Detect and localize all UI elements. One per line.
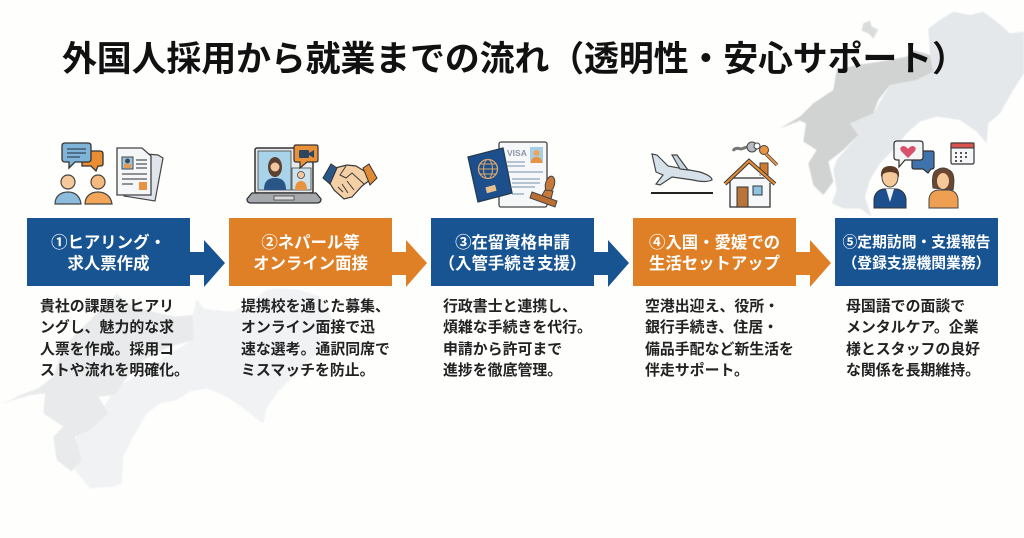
description text: 行政書士と連携し、 — [443, 299, 577, 315]
panel: step 1 hearing — [27, 142, 225, 379]
step heading box: 生活セットアップ — [649, 254, 780, 272]
step heading box: ⑤定期訪問・支援報告 — [842, 234, 990, 250]
icon: people talking and job document — [54, 142, 164, 205]
description text: 様とスタッフの良好 — [846, 342, 980, 358]
description text — [846, 298, 980, 379]
step heading box: ②ネパール等 — [261, 234, 360, 252]
icon: passport visa and stamp — [467, 141, 558, 208]
step heading box: ①ヒアリング・ — [51, 234, 166, 252]
icon: passport visa and stamp: VISA — [507, 148, 527, 158]
panel: step 4 arrival and setup — [633, 142, 831, 379]
icon: staff, speech bubbles and calendar — [874, 140, 975, 208]
arrow — [190, 240, 225, 287]
icon: laptop video call and handshake — [246, 144, 378, 204]
step heading box — [633, 218, 796, 286]
description text — [40, 298, 189, 379]
title: 外国人採用から就業までの流れ（透明性・安心サポート） — [62, 40, 967, 79]
arrow — [594, 240, 629, 287]
description text: 進捗を徹底管理。 — [443, 363, 562, 379]
arrow — [392, 240, 427, 287]
description text: 速な選考。通訳同席で — [241, 342, 390, 358]
description text: 母国語での面談で — [846, 299, 965, 315]
description text: 空港出迎え、役所・ — [645, 299, 779, 315]
description text: ミスマッチを防止。 — [241, 363, 375, 379]
step heading box: （登録支援機関業務） — [842, 256, 990, 272]
description text: 貴社の課題をヒアリ — [40, 299, 174, 315]
description text: 提携校を通じた募集、 — [241, 299, 390, 315]
step heading box — [431, 218, 594, 286]
step heading box: ③在留資格申請 — [455, 234, 570, 252]
panel: step 3 visa application — [431, 141, 629, 379]
panel: step 5 regular visits — [835, 140, 998, 379]
description text: 人票を作成。採用コ — [40, 342, 174, 358]
description text: ングし、魅力的な求 — [40, 320, 174, 336]
description text — [645, 298, 794, 379]
step heading box: （入管手続き支援） — [439, 254, 586, 272]
step heading box — [229, 218, 392, 286]
description text: ストや流れを明確化。 — [40, 363, 189, 379]
panel: step 2 online interview — [229, 144, 427, 379]
step heading box: ④入国・愛媛での — [649, 234, 780, 252]
step heading box: 求人票作成 — [68, 254, 149, 272]
description text: 銀行手続き、住居・ — [645, 320, 778, 336]
step heading box — [835, 218, 998, 286]
description text: な関係を長期維持。 — [846, 363, 980, 379]
description text: 煩雑な手続きを代行。 — [443, 320, 592, 336]
step heading box: オンライン面接 — [253, 254, 368, 272]
description text: 申請から許可まで — [443, 342, 562, 358]
description text: オンライン面接で迅 — [241, 320, 375, 336]
description text: メンタルケア。企業 — [846, 320, 979, 336]
description text: 備品手配など新生活を — [645, 342, 794, 358]
description text — [443, 298, 592, 379]
arrow — [796, 240, 831, 287]
description text: 伴走サポート。 — [645, 363, 749, 379]
step heading box — [27, 218, 190, 286]
description text — [241, 298, 390, 379]
icon: airplane, house and keys — [651, 142, 778, 208]
